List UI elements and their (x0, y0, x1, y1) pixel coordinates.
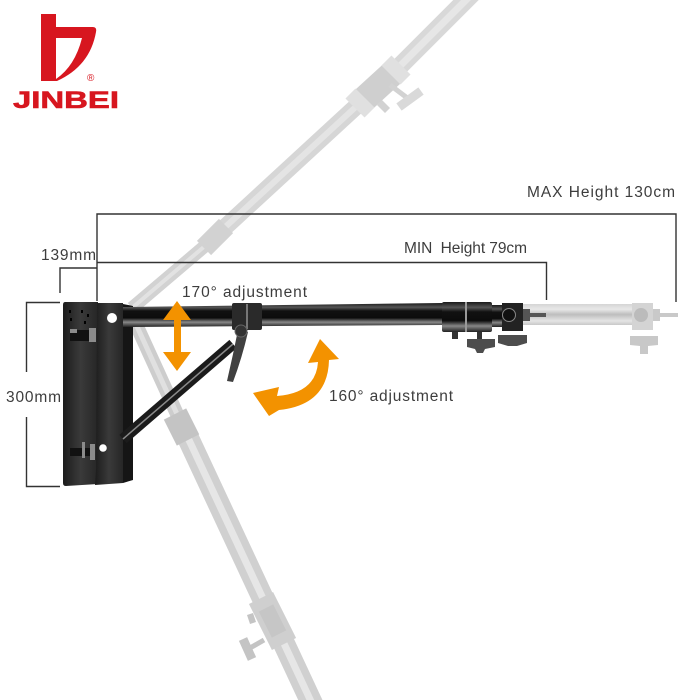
end joint (502, 303, 523, 331)
dimension: 139mm (60, 268, 97, 293)
faded spigot (653, 309, 678, 321)
upper fixing bolts (70, 330, 92, 341)
spigot (523, 309, 546, 321)
faded knob (630, 336, 658, 354)
arrow: 160 degree (253, 339, 339, 416)
lower fixing bolts (70, 448, 90, 456)
lower pole knobs (247, 613, 256, 624)
arrow: 170 degree (163, 301, 191, 371)
lower pole clamp (261, 598, 284, 644)
top mounting holes (69, 310, 89, 324)
label: min height: MIN Height 79cm (404, 240, 527, 257)
clamp knobs (452, 332, 482, 340)
horizontal arm (123, 302, 546, 382)
faded upper pole (132, 0, 478, 308)
lever handle (227, 330, 248, 382)
brand name: JINBEI (13, 87, 119, 114)
upper pole lower collar (204, 226, 226, 248)
registered mark: ® (87, 73, 95, 84)
dimension: 300mm (26, 302, 60, 486)
faded lower pole (135, 322, 322, 700)
faded extended tube (520, 303, 678, 354)
logo: Jinbei (13, 14, 119, 114)
lever pivot (235, 325, 247, 337)
support strut (123, 344, 233, 439)
front plate (95, 303, 123, 485)
top hole (107, 313, 117, 323)
dimension: min height (97, 262, 546, 300)
label: max height: MAX Height 130cm (527, 184, 675, 201)
label: 170 degree: 170° adjustment (182, 284, 308, 301)
back mounting plate (63, 302, 98, 486)
bottom hole (99, 444, 107, 452)
upper pole knob (377, 100, 390, 113)
logo mark (41, 14, 96, 81)
label: 160 degree: 160° adjustment (329, 388, 454, 405)
inner tube (492, 305, 504, 327)
lower pole collar (175, 414, 188, 440)
faded joint (632, 303, 653, 330)
dimension: max height (97, 214, 676, 302)
label: 139mm: 139mm (41, 247, 96, 264)
label: 300mm: 300mm (6, 389, 61, 406)
sliding clamp (442, 302, 492, 332)
wall bracket (63, 302, 133, 486)
upper pole clamp (360, 70, 396, 103)
rear side plate (123, 304, 133, 483)
arm clamp (232, 303, 262, 330)
